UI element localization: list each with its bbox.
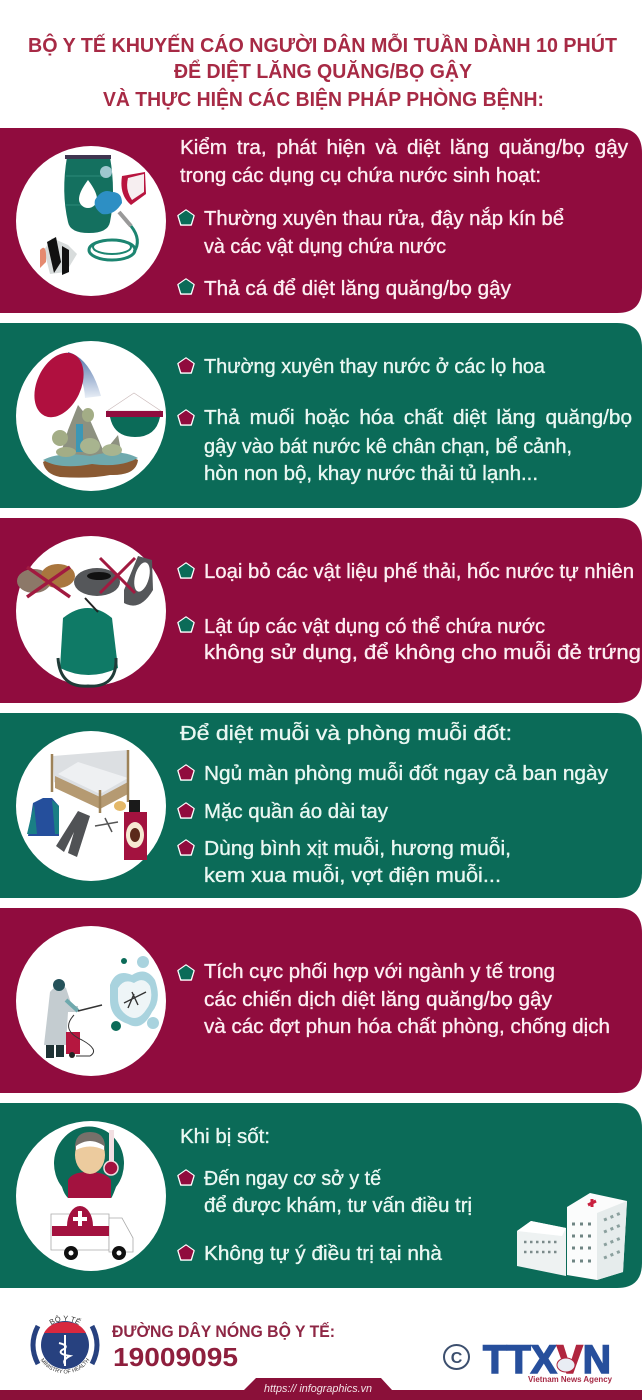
panel: when having a fever <box>0 1103 642 1288</box>
text: mosquito heading: Để diệt muỗi và phòng muỗi đốt: <box>180 722 512 745</box>
bullet: change vase water: Thường xuyên thay nước ở các lọ hoa <box>204 356 546 378</box>
bullet: sleep under net: Ngủ màn phòng muỗi đốt ngay cả ban ngày <box>204 762 608 785</box>
panel: mosquito bite prevention <box>0 713 642 898</box>
title: ĐỂ DIỆT LĂNG QUĂNG/BỌ GẬY <box>174 59 473 83</box>
bullet: cooperate in campaigns: và các đợt phun hóa chất phòng, chống dịch <box>204 1016 610 1038</box>
hotline text: 19009095 <box>113 1342 238 1372</box>
bullet: wash and cover: và các vật dụng chứa nước <box>204 236 446 258</box>
logo: TTXVN: C <box>451 1350 463 1367</box>
icon: barrel, sponge, hose and fish <box>16 146 166 296</box>
panel: remove waste <box>0 518 642 703</box>
bullet: add salt or chemicals <box>178 407 632 485</box>
logo: Ministry of Health <box>30 1315 100 1374</box>
icon: bed net, clothes and spray <box>16 731 166 881</box>
bullet: go to clinic: để được khám, tư vấn điều trị <box>204 1195 472 1217</box>
footer bar with website <box>0 1378 642 1400</box>
bullet: overturn containers: không sử dụng, để không cho muỗi đẻ trứng <box>204 641 641 664</box>
icon: bowl, salt and bonsai <box>16 341 166 491</box>
icon: waste, tyre and bucket <box>16 536 166 686</box>
icon: sick man and ambulance <box>16 1121 166 1271</box>
logo: TTXVN: Vietnam News Agency <box>528 1375 613 1384</box>
title: BỘ Y TẾ KHUYẾN CÁO NGƯỜI DÂN MỖI TUẦN DÀNH 10 PHÚT <box>28 33 617 57</box>
panel: cooperate with health sector <box>0 908 642 1093</box>
title <box>28 33 617 111</box>
logo: TTXVN: TTXVN <box>483 1338 611 1382</box>
bullet: sprays and repellents: Dùng bình xịt muỗi, hương muỗi, <box>204 837 511 860</box>
bullet: add salt or chemicals: Thả muối hoặc hóa chất diệt lăng quăng/bọ <box>204 407 632 429</box>
logo: Ministry of Health: MINISTRY OF HEALTH <box>40 1358 90 1374</box>
bullet: sprays and repellents <box>178 837 511 887</box>
bullet: wash and cover <box>178 207 564 258</box>
text: panel heading <box>180 137 628 187</box>
bullet: add salt or chemicals: gậy vào bát nước kê chân chạn, bể cảnh, <box>204 436 572 458</box>
bullet: overturn containers: Lật úp các vật dụng có thể chứa nước <box>204 616 545 638</box>
bullet: overturn containers <box>178 616 641 664</box>
icon: worker spraying mosquito <box>16 926 166 1076</box>
footer bar with website: https:// infographics.vn <box>264 1383 372 1395</box>
bullet: go to clinic: Đến ngay cơ sở y tế <box>204 1168 381 1190</box>
bullet: cooperate in campaigns: các chiến dịch diệt lăng quăng/bọ gậy <box>204 989 552 1011</box>
text: panel heading: Kiểm tra, phát hiện và diệt lăng quăng/bọ gậy <box>180 137 628 159</box>
bullet: long sleeves: Mặc quần áo dài tay <box>204 801 388 823</box>
bullet: wash and cover: Thường xuyên thau rửa, đậy nắp kín bể <box>204 207 564 230</box>
bullet: release fish: Thả cá để diệt lăng quăng/bọ gậy <box>204 278 511 300</box>
bullet: add salt or chemicals: hòn non bộ, khay nước thải tủ lạnh... <box>204 463 538 485</box>
hotline text <box>112 1322 335 1372</box>
bullet: go to clinic <box>178 1168 472 1217</box>
bullet: remove waste materials: Loại bỏ các vật liệu phế thải, hốc nước tự nhiên <box>204 561 634 583</box>
panel: change water <box>0 323 642 508</box>
bullet: cooperate in campaigns: Tích cực phối hợp với ngành y tế trong <box>204 961 555 983</box>
panel: check water containers <box>0 128 642 313</box>
text: panel heading: trong các dụng cụ chứa nước sinh hoạt: <box>180 165 541 187</box>
title: VÀ THỰC HIỆN CÁC BIỆN PHÁP PHÒNG BỆNH: <box>103 87 544 111</box>
bullet: sprays and repellents: kem xua muỗi, vợt điện muỗi... <box>204 864 501 887</box>
bullet: no self treatment: Không tự ý điều trị tại nhà <box>204 1243 443 1265</box>
hotline text: ĐƯỜNG DÂY NÓNG BỘ Y TẾ: <box>112 1322 335 1341</box>
icon: hospital buildings <box>517 1193 627 1280</box>
bullet: cooperate in campaigns <box>178 961 610 1038</box>
logo: Ministry of Health: BỘ Y TẾ <box>49 1315 82 1325</box>
text: fever heading: Khi bị sốt: <box>180 1126 270 1148</box>
